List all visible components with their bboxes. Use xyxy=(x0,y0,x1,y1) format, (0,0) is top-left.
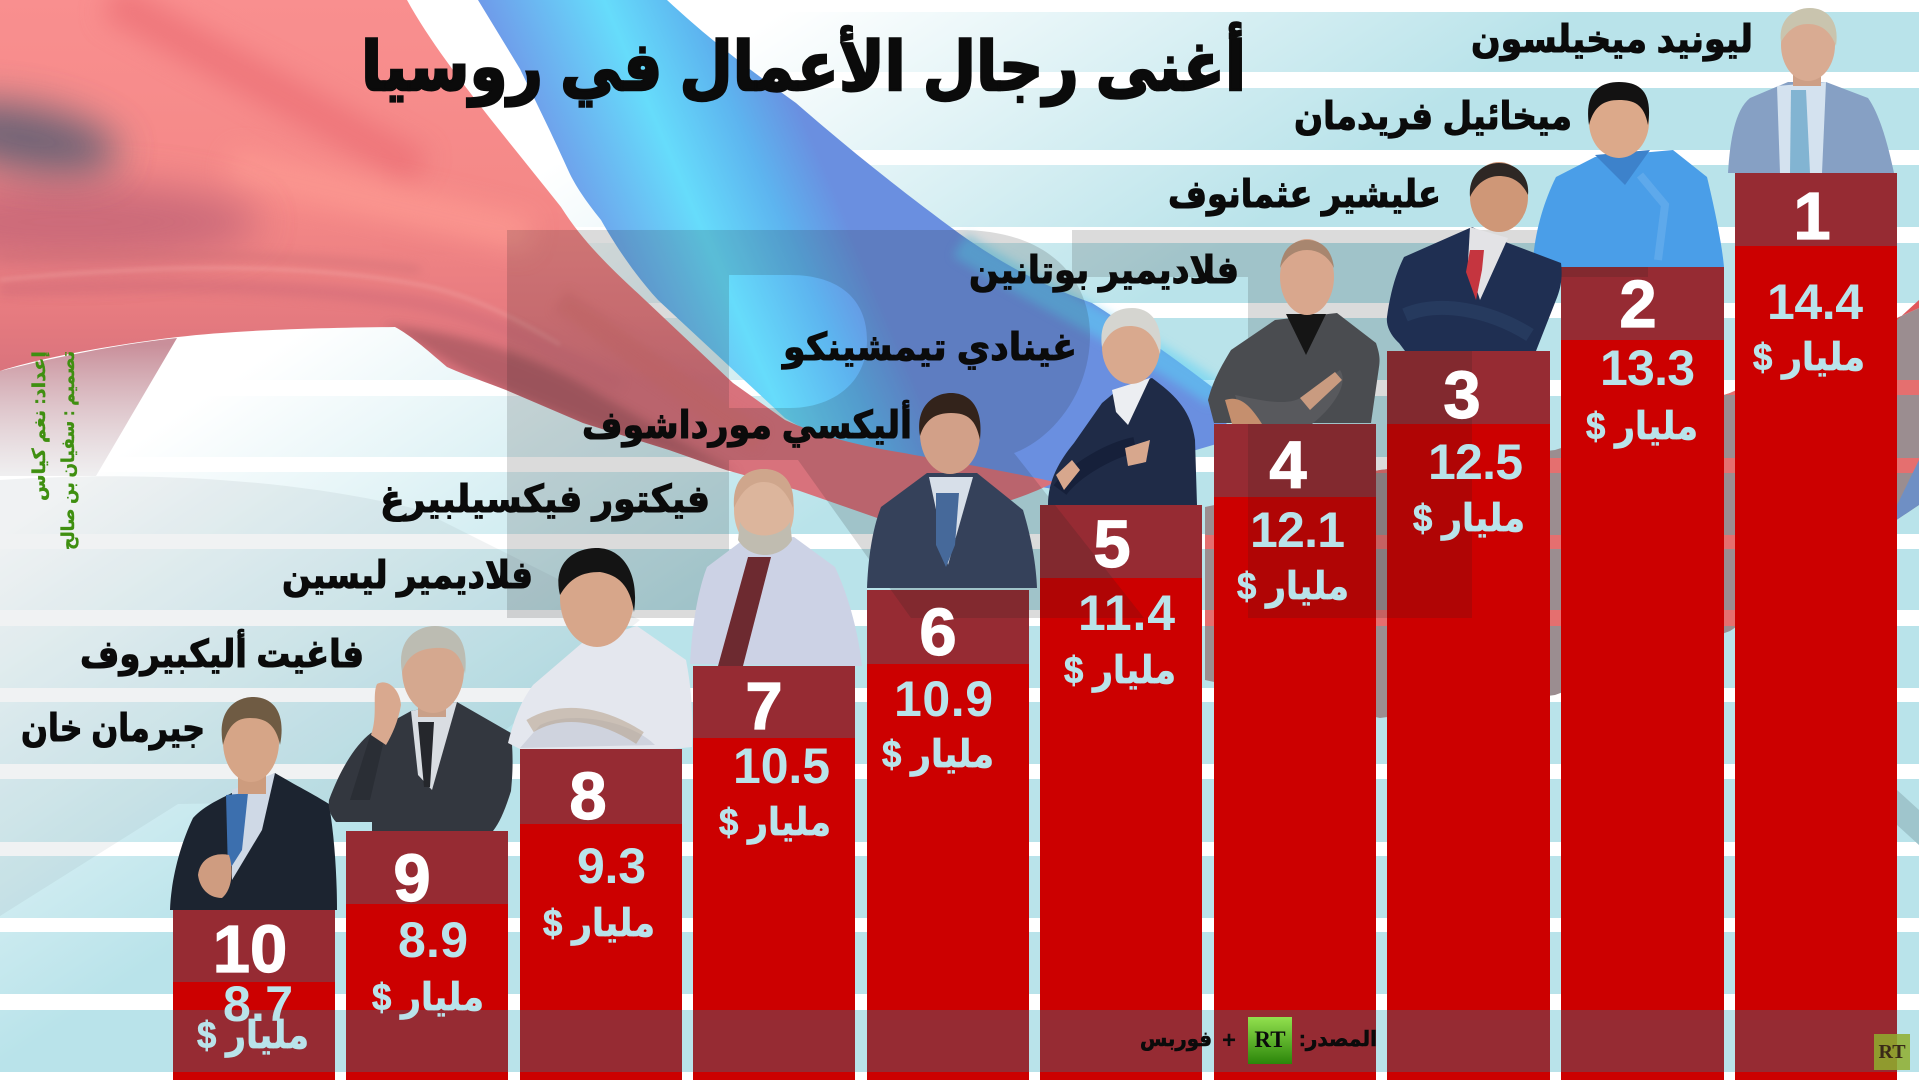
bar: rank 3 xyxy=(1387,351,1550,1080)
value 1: مليار $ xyxy=(1753,337,1865,379)
value 10: 8.7 xyxy=(223,976,293,1032)
name 5: غينادي تيمشينكو xyxy=(781,327,1077,369)
value 10 xyxy=(197,976,309,1057)
person 2: Mikhail Fridman xyxy=(1533,82,1724,267)
bar: rank 5 xyxy=(1040,505,1202,1080)
credits: vertical green text: إعداد: نغم كياس xyxy=(29,351,49,501)
value 4: مليار $ xyxy=(1237,566,1349,608)
value 2: مليار $ xyxy=(1586,406,1698,448)
value 8: 9.3 xyxy=(577,838,646,894)
rank numbers xyxy=(213,179,1831,987)
blue ribbon xyxy=(478,0,1230,490)
name 7: فيكتور فيكسيلبيرغ xyxy=(380,479,710,521)
value 2: 13.3 xyxy=(1600,340,1695,396)
value 3 xyxy=(1413,434,1525,540)
rank numbers: 7 xyxy=(745,669,783,744)
name 6: أليكسي مورداشوف xyxy=(582,400,912,447)
bar: rank 8 xyxy=(520,749,682,1080)
value 9: 8.9 xyxy=(398,912,468,968)
value 1: 14.4 xyxy=(1767,274,1863,330)
icon: RT green logo: RT xyxy=(1254,1027,1286,1052)
credits: vertical green text xyxy=(29,351,79,550)
source line: المصدر: xyxy=(1299,1028,1377,1051)
bar: rank 10 xyxy=(173,910,335,1080)
person 9: Vagit Alekperov xyxy=(329,626,513,831)
rank numbers: 9 xyxy=(393,841,431,916)
person 7: Viktor Vekselberg xyxy=(690,469,862,666)
value 5 xyxy=(1064,585,1176,692)
value 8 xyxy=(543,838,655,945)
value 8: مليار $ xyxy=(543,903,655,945)
source line xyxy=(1140,1017,1377,1064)
icon: RT corner logo xyxy=(1874,1034,1910,1070)
value 6: مليار $ xyxy=(882,734,994,776)
name 9: فاغيت أليكبيروف xyxy=(80,629,364,677)
rank numbers: 5 xyxy=(1093,507,1131,582)
bar: rank 4 xyxy=(1214,424,1376,1080)
rank numbers: 3 xyxy=(1443,358,1481,433)
icon: RT corner logo: RT xyxy=(1878,1041,1906,1063)
value 2 xyxy=(1586,340,1698,448)
name 4: فلاديمير بوتانين xyxy=(969,250,1239,292)
rank numbers: 6 xyxy=(919,595,957,670)
source line: فوربس xyxy=(1140,1028,1212,1051)
watermark: large RT letters xyxy=(507,230,1648,618)
source line: + xyxy=(1222,1027,1236,1054)
rank numbers: 2 xyxy=(1619,267,1657,342)
value 4: 12.1 xyxy=(1250,502,1345,558)
person 3: Alisher Usmanov xyxy=(1387,162,1562,351)
rank numbers: 4 xyxy=(1269,428,1307,503)
icon: RT green logo xyxy=(1248,1017,1292,1064)
value 6: 10.9 xyxy=(894,671,993,727)
value 7 xyxy=(719,738,831,844)
value 9 xyxy=(372,912,484,1019)
title: أغنى رجال الأعمال في روسيا xyxy=(361,22,1246,107)
value 7: مليار $ xyxy=(719,802,831,844)
person 4: Vladimir Potanin xyxy=(1208,239,1380,424)
person 5: Gennady Timchenko xyxy=(1048,308,1197,505)
bar: rank 1 xyxy=(1735,173,1897,1080)
value 9: مليار $ xyxy=(372,977,484,1019)
name 3: عليشير عثمانوف xyxy=(1168,174,1441,216)
value 4 xyxy=(1237,502,1349,608)
red ribbon xyxy=(0,0,1055,520)
value 5: 11.4 xyxy=(1078,585,1175,641)
name 2: ميخائيل فريدمان xyxy=(1294,96,1572,138)
value 5: مليار $ xyxy=(1064,650,1176,692)
value 10: مليار $ xyxy=(197,1015,309,1057)
background: right grey and red ribbon behind bars xyxy=(1200,300,1919,845)
rank numbers: 1 xyxy=(1793,179,1831,254)
name 10: جيرمان خان xyxy=(21,708,205,750)
name 8: فلاديمير ليسين xyxy=(282,555,533,597)
bar: rank 2 xyxy=(1561,267,1724,1080)
rank numbers: 8 xyxy=(569,759,607,834)
credits: vertical green text: تصميم : سفيان بن صالح xyxy=(58,351,79,550)
person 1: Leonid Mikhelson xyxy=(1728,8,1894,173)
person 8: Vladimir Lisin xyxy=(508,548,692,749)
bar: rank 9 xyxy=(346,831,508,1080)
value 1 xyxy=(1753,274,1865,379)
person 10: German Khan xyxy=(170,697,337,910)
name 1: ليونيد ميخيلسون xyxy=(1471,19,1753,61)
bar: rank 7 xyxy=(693,666,855,1080)
value 3: مليار $ xyxy=(1413,498,1525,540)
person 6: Alexey Mordashov xyxy=(867,393,1037,588)
rank numbers: 10 xyxy=(213,912,287,987)
value 3: 12.5 xyxy=(1428,434,1523,490)
value 6 xyxy=(882,671,994,776)
value 7: 10.5 xyxy=(733,738,830,794)
bar: rank 6 xyxy=(867,590,1029,1080)
